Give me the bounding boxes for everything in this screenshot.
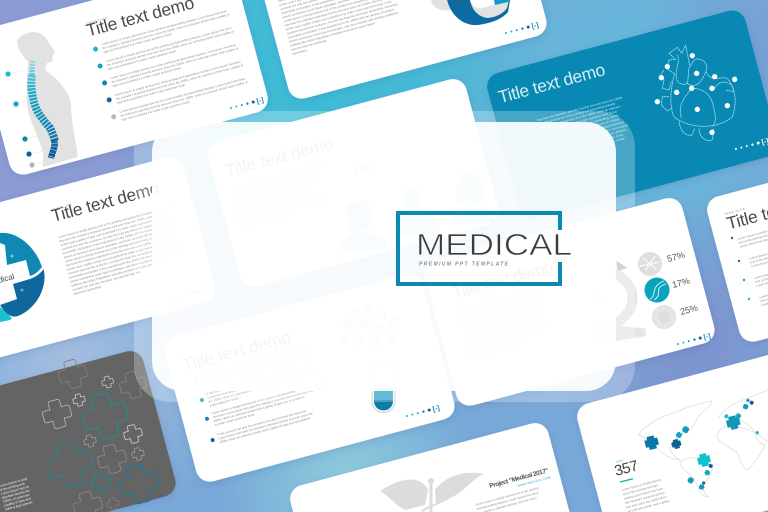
body text: survived not only five centuries, but also the leap into electronic typesetting, remaining: [61, 218, 173, 251]
stat: 25%: [652, 303, 699, 329]
body text: printer took a galley of type and scrambled it: [240, 210, 298, 230]
body text: Lorem Ipsum is simply dummy: [621, 477, 662, 492]
heading: doctors slide: Title text demo: [223, 133, 335, 181]
body text: Lorem Ipsum is simply dummy text of the printing and typesetting: [237, 194, 322, 220]
body text: text ever since the 1500s when: [626, 495, 667, 509]
footer mark: [-]: [432, 405, 441, 413]
logo frame: [398, 213, 560, 284]
heading: circle slide: Title text demo: [49, 178, 161, 226]
body text: survived not only five centuries, but also the leap into electronic typesetting, remaining: [68, 242, 179, 276]
stat: doctors: 57%: [353, 162, 373, 176]
icon: anatomical heart: [655, 45, 737, 141]
footer mark: [504, 22, 540, 38]
heading: microscope slide: Title text demo: [450, 256, 556, 302]
bullet list: type and scrambled it to make a type specimen book.: [112, 66, 182, 88]
footer mark: [469, 218, 494, 228]
body text: printer took a galley of type and scrambled it to make a type specimen book. It has: [66, 239, 174, 272]
footer mark: [173, 287, 209, 303]
body text: sheets containing Lorem Ipsum passages, and more recently with desktop publishing: [289, 10, 399, 44]
panel: heart slide: [484, 7, 768, 222]
body text: Lorem Ipsum is simply dummy text of the printing and typesetting industry. Lorem Ipsum: [64, 229, 179, 263]
slide label: DEMO SLIDE: [51, 203, 72, 212]
footer mark: [-]: [531, 22, 540, 30]
panel: doctors slide: [205, 76, 502, 290]
bullet list: Lorem Ipsum is simply dummy text of the printing and typesetting industry since: [207, 369, 310, 400]
bullet list: Lorem Ipsum is simply dummy text of the printing and typesetting. And also the leap into: [211, 381, 325, 415]
bullet list: Lorem Ipsum is simply dummy text of the printing and typesetting industry. Lorem Ipsum has been: [110, 43, 237, 80]
bullet list: type and scrambled it to make a type specimen book.: [121, 99, 191, 122]
total underline: [620, 479, 633, 482]
body text: printer took a galley of type and scrambled it to make a type specimen book. It has: [285, 0, 393, 31]
footer mark: [734, 138, 768, 154]
body text: Lorem Ipsum is simply dummy text of the printing and typesetting industry: [520, 101, 616, 131]
body text: printer took a galley of type and scrambled it: [469, 340, 527, 359]
slide label: DEMO SLIDE: [724, 207, 746, 216]
bullet list: electronic Lorem Ipsum has been the industry's standard dummy text ever since the: [212, 386, 321, 419]
map crosses: [643, 398, 759, 490]
stat: 57%: 57%: [666, 250, 686, 264]
bullet list: Lorem Ipsum is simply dummy text of the printing and typesetting industry. Lorem Ipsum has been: [115, 59, 241, 97]
body text: survived not only five centuries, but also the leap into electronic typesetting, remaining: [286, 2, 398, 36]
panel: world map slide: [574, 338, 768, 512]
body text: Lorem Ipsum is simply dummy text of the printing and typesetting industry. Lorem Ipsum: [58, 205, 172, 239]
icon: spine: [31, 61, 55, 158]
body text: Lorem Ipsum is simply dummy text of the printing and typesetting industry. Lorem Ipsum: [515, 123, 629, 157]
panel: circle infographic slide: [0, 154, 219, 368]
stat: 17%: 17%: [671, 276, 691, 290]
bullet list: type and scrambled it to make a type specimen book.: [103, 32, 173, 54]
body text: [737, 225, 768, 309]
body text: and typesetting industry. Lorem Ipsum has been: [476, 491, 539, 511]
body text: essentially unchanged. It was popularised in the 1960s with: [235, 186, 312, 210]
body text: has been the industry's standard dummy text ever since the 1500s: [239, 198, 325, 225]
bullet list: Lorem Ipsum is simply dummy text of the printing and typesetting industry. Lorem Ipsum has been: [101, 9, 228, 46]
body text: has been the industry's standard dummy text ever since: [468, 331, 541, 354]
footer mark: [676, 333, 712, 349]
body text: sheets containing Lorem Ipsum passages, and more recently with desktop publishing: [514, 120, 624, 153]
body text: printer took a galley of type and scrambled it to make a type: [232, 176, 310, 201]
body text: has been the industry's standard dummy text ever since the 1500s: [458, 292, 545, 319]
frosted glass inner panel: [152, 122, 616, 391]
bullet list: the industry's standard dummy text ever since the 1500s, when an unknown printer took a galley of: [102, 12, 230, 50]
body text: survived not only five centuries, but also the leap into electronic: [462, 305, 544, 330]
body text: has been the industry's standard dummy text ever since the 1500s, when an unknown: [65, 234, 177, 268]
bullet list: 1500s, when an unknown printer took a galley of type and scrambled it.: [219, 416, 311, 444]
panel: caduceus slide: [287, 420, 584, 512]
bullet list: [92, 8, 249, 124]
body text: of the printing and: [0, 482, 25, 492]
project link: WWW.MEDICAL.COM: [517, 475, 552, 488]
stat: 25%: 25%: [679, 303, 699, 317]
bullet list: the industry's standard dummy text ever since the 1500s, when an unknown printer took a galley of: [107, 29, 234, 67]
bullet list: It has survived not only five centuries, but also the leap into electronic: [217, 409, 307, 437]
footer mark: [-]: [256, 97, 265, 105]
body text: printer took a galley of type and scrambled it to make a type specimen book. It has: [511, 109, 618, 142]
icon: male doctor: [392, 188, 440, 236]
heading: test tube slide: Title text demo: [181, 327, 293, 375]
body text: survived not only five centuries, but also the leap into electronic typesetting, remain: [518, 136, 626, 169]
panel: microscope slide: [421, 195, 718, 409]
body text: essentially unchanged. It was popularised in the 1960s with the release of Letraset: [288, 7, 395, 40]
bullet list: Lorem Ipsum is simply dummy text of the printing and typesetting industry. Lorem Ipsum has been: [119, 76, 246, 114]
bullet list: the industry's standard dummy text ever since the 1500s, when an unknown printer took a galley of: [120, 80, 248, 118]
frosted glass outer band: [134, 111, 635, 402]
bullet list: the industry's standard dummy text ever since the 1500s, when an unknown printer took a galley of: [116, 63, 244, 101]
icon: caduceus: [380, 473, 484, 512]
body text: survived not only five centuries, but also the leap into electronic typesetting, remain: [512, 113, 620, 145]
bullet list: 1500s, when an unknown printer took a galley of type and scrambled it: [213, 395, 305, 423]
body text: essentially unchanged. It was popularised in the 1960s with the release of Letraset: [69, 247, 176, 280]
bullet list: It has survived not only five centuries, but also the leap into electronic typesetting: [206, 364, 311, 396]
bullet list: Lorem Ipsum has been the industry's standard dummy text ever since the: [218, 411, 313, 440]
total number: 357: [613, 457, 640, 480]
bullet list: the 1500s, when an unknown printer took a galley of type and scrambled it to make: [208, 371, 316, 404]
body text: has been the industry's standard dummy text ever since the 1500s: [231, 169, 318, 196]
logo: Medical: [398, 213, 572, 284]
body text: printer took a galley of type and scrambled it to make a type specimen book. It has: [60, 215, 167, 247]
body text: has been the industry's standard dummy text ever since the 1500s, when an unknown: [516, 127, 627, 161]
bullet list: Lorem Ipsum is simply dummy text of the printing and typesetting industry. Lorem Ipsum has been: [106, 26, 232, 63]
project title: Project "Medical 2017": [489, 467, 549, 490]
panel: top text slide: [253, 0, 550, 102]
body text: survived not only five centuries, but also the leap into: [72, 270, 141, 292]
icon: nurse: [340, 199, 387, 250]
bullet list: Lorem Ipsum has been the industry's standard dummy text ever since the 1500s: [203, 354, 308, 385]
icon: female doctor: [449, 172, 496, 226]
body text: software like Aldus PageMaker including versions of Lorem Ipsum.: [71, 261, 157, 288]
body text: has been the industry's standard dummy text ever since the 1500s, when an unknown: [510, 104, 621, 138]
bullet list: [193, 343, 333, 446]
body text: 1500s, an unknown: [2, 493, 30, 504]
icon: blue ribbon badge: [431, 0, 510, 25]
body text: Lorem Ipsum is simply dummy text of the printing and typesetting: [466, 322, 551, 348]
bullet list: a type specimen book.: [209, 396, 239, 408]
body text: essentially unchanged. It was popularised in the 1960s with the release of Letraset: [513, 117, 620, 149]
body text: survived not only five centuries, but also the leap into electronic: [234, 180, 316, 205]
spine markers: [5, 69, 52, 168]
body text: software like Aldus PageMaker including versions of Lorem Ipsum.: [290, 21, 376, 48]
icon: medical cross circle: [0, 233, 45, 322]
body text: sheets containing Lorem Ipsum passages, and more recently: [236, 190, 316, 215]
icon: body silhouette: [17, 32, 78, 167]
body text: also the leap into electronic: [291, 38, 327, 52]
body text: printer took a galley of type and scrambled it to make a type: [460, 300, 538, 325]
body text: essentially unchanged. It was popularised in the 1960s with the release of Letraset: [62, 223, 169, 255]
body text: a galley of type and: [3, 496, 31, 508]
body text: sheets containing Lorem Ipsum passages, and more recently: [465, 317, 544, 342]
body text: Lorem Ipsum is simply dummy text of the printing: [475, 486, 539, 507]
body text: Lorem Ipsum has be: [0, 485, 30, 496]
body text: text of the printing and type: [622, 483, 659, 496]
body text: the industry's standard dummy: [625, 490, 666, 505]
footer mark: [405, 405, 441, 421]
panel: test tube slide: [161, 271, 458, 485]
bullet list: type and scrambled it to make a type specimen book.: [108, 49, 177, 71]
body text: has been the industry's standard dummy text ever since the 1500s: [537, 95, 623, 122]
icon: molecule ring: [340, 307, 398, 347]
body text: essentially unchanged. It was popularised in the 1960s with: [463, 312, 541, 336]
total label: TOTAL: [615, 459, 624, 464]
panel: spine slide: [0, 0, 271, 178]
logo tagline: PREMIUM PPT TEMPLATE: [419, 262, 509, 268]
stat: 17%: [644, 276, 691, 302]
body text: setting Lorem Ipsum has been: [624, 486, 664, 501]
body text: electronic typesetting.: [73, 285, 102, 296]
world map: [638, 390, 768, 497]
heading: heart slide: Title text demo: [496, 59, 607, 107]
bullet list: the industry's standard dummy text ever since the 1500s, when an unknown printer took a galley of: [111, 46, 239, 84]
body text: has been the industry's standard dummy text ever since the 1500s, when an unknown: [59, 210, 170, 243]
body text: sheets containing Lorem Ipsum passages, and more recently with desktop publishing: [70, 251, 180, 284]
icon: microscope: [591, 261, 646, 344]
panel: right bullet slide: [704, 131, 768, 345]
body text: standard dummy tex: [1, 488, 31, 500]
body text: Lorem Ipsum is simply dummy text of the printing and typesetting industry.: [230, 162, 326, 191]
bullet list: It has survived not only five centuries, but also the leap into electronic typesetting: [201, 346, 306, 378]
outlined crosses: [40, 357, 162, 512]
footer mark: [229, 97, 265, 113]
icon: test tube: [372, 362, 395, 412]
stat: 57%: [638, 250, 686, 276]
body text: typesetting.: [292, 48, 308, 56]
logo wordmark: MEDICAL: [416, 228, 572, 262]
bullet list: to make a type specimen book.: [214, 412, 256, 427]
footer mark: [-]: [200, 287, 209, 295]
bullet list: Lorem Ipsum is simply dummy text of the printing and typesetting industry.: [202, 352, 298, 381]
slide label: DEMO SLIDE: [86, 16, 108, 25]
bullet dots: [731, 237, 750, 300]
footer mark: [-]: [703, 333, 712, 341]
body text: printer took a galley of type and scrambled it to make a type specimen book. It has: [517, 132, 624, 165]
body text: Lorem Ipsum is simply dummy text of the printing and typesetting industry.: [457, 284, 553, 313]
body text: sheets containing Lorem Ipsum passages, and more recently with desktop publishing: [63, 226, 174, 259]
bullet list: type and scrambled it to make a type specimen book.: [117, 83, 186, 105]
panel: gray crosses slide: [0, 348, 179, 512]
body text: essentially unchanged in the 1960s.: [519, 156, 566, 172]
body text: make a type specim: [4, 500, 33, 511]
